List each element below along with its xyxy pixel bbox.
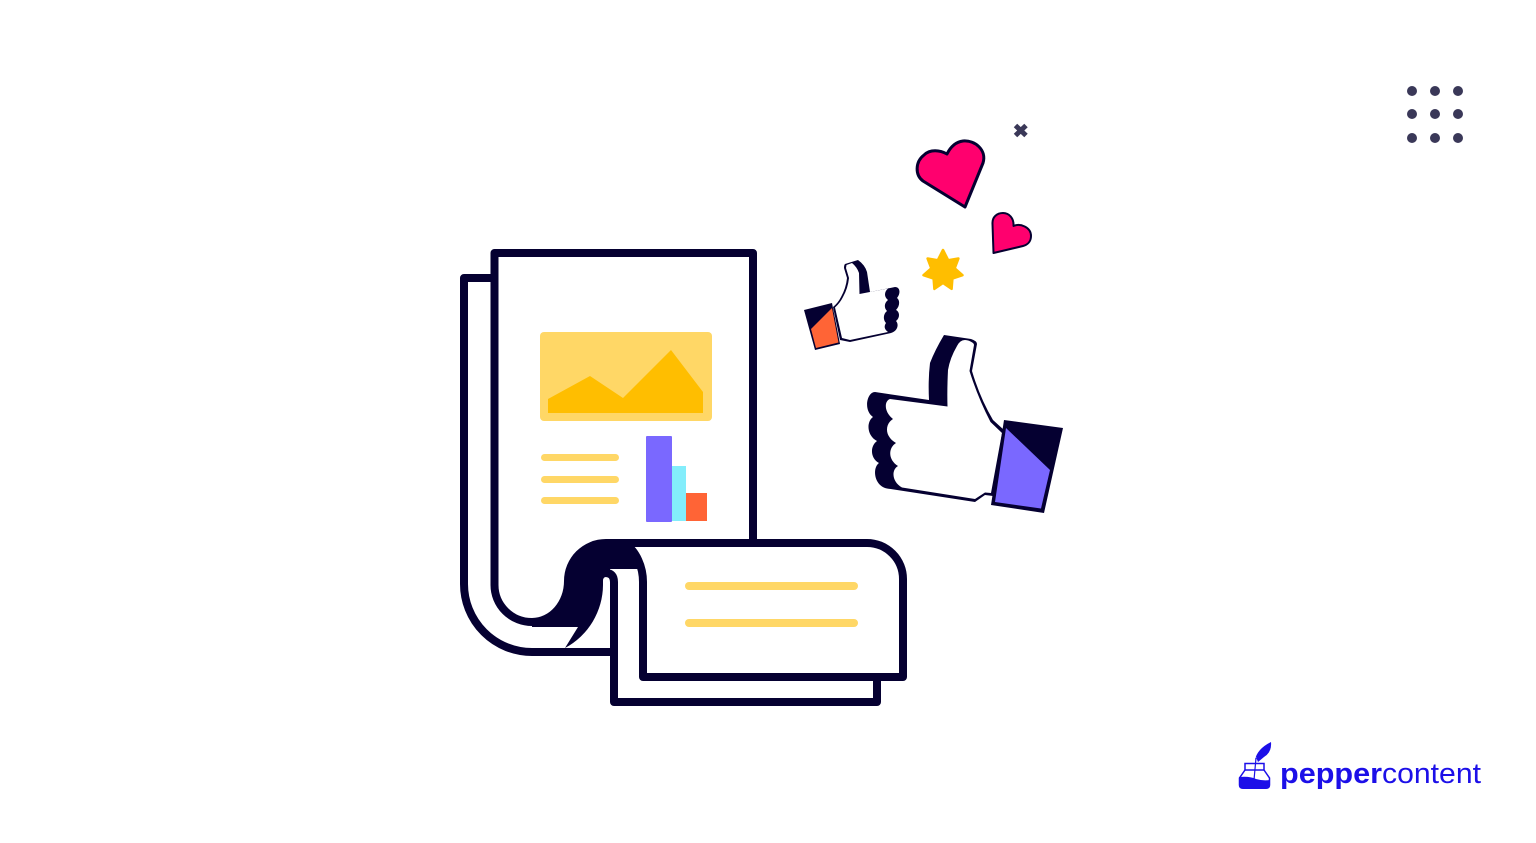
- area chart card: [540, 332, 712, 421]
- wordmark: pepper: [1280, 758, 1382, 790]
- bar chart: [646, 436, 707, 522]
- icon: small heart: [992, 213, 1031, 253]
- large cuff: [991, 420, 1063, 513]
- icon: large thumbs up: [867, 335, 1063, 513]
- icon: dot grid: [1407, 86, 1463, 143]
- small cuff: [804, 303, 840, 350]
- logo: pepper content: [1239, 742, 1481, 790]
- icon: cross mark: [1016, 126, 1026, 136]
- wordmark: content: [1382, 758, 1481, 790]
- flap text lines: [685, 582, 858, 627]
- back page outline: [464, 278, 612, 652]
- inner page curl: [494, 585, 575, 622]
- curled fold: [532, 539, 638, 648]
- lower back sheet: [606, 573, 877, 702]
- icon: ink bottle and quill: [1239, 742, 1271, 789]
- icon: star: [924, 250, 962, 289]
- document scroll: [464, 253, 903, 702]
- icon: large heart: [917, 141, 984, 207]
- front flap: [610, 543, 903, 677]
- text lines: [541, 454, 619, 504]
- main page outline: [494, 253, 753, 585]
- icon: small thumbs up: [804, 260, 899, 350]
